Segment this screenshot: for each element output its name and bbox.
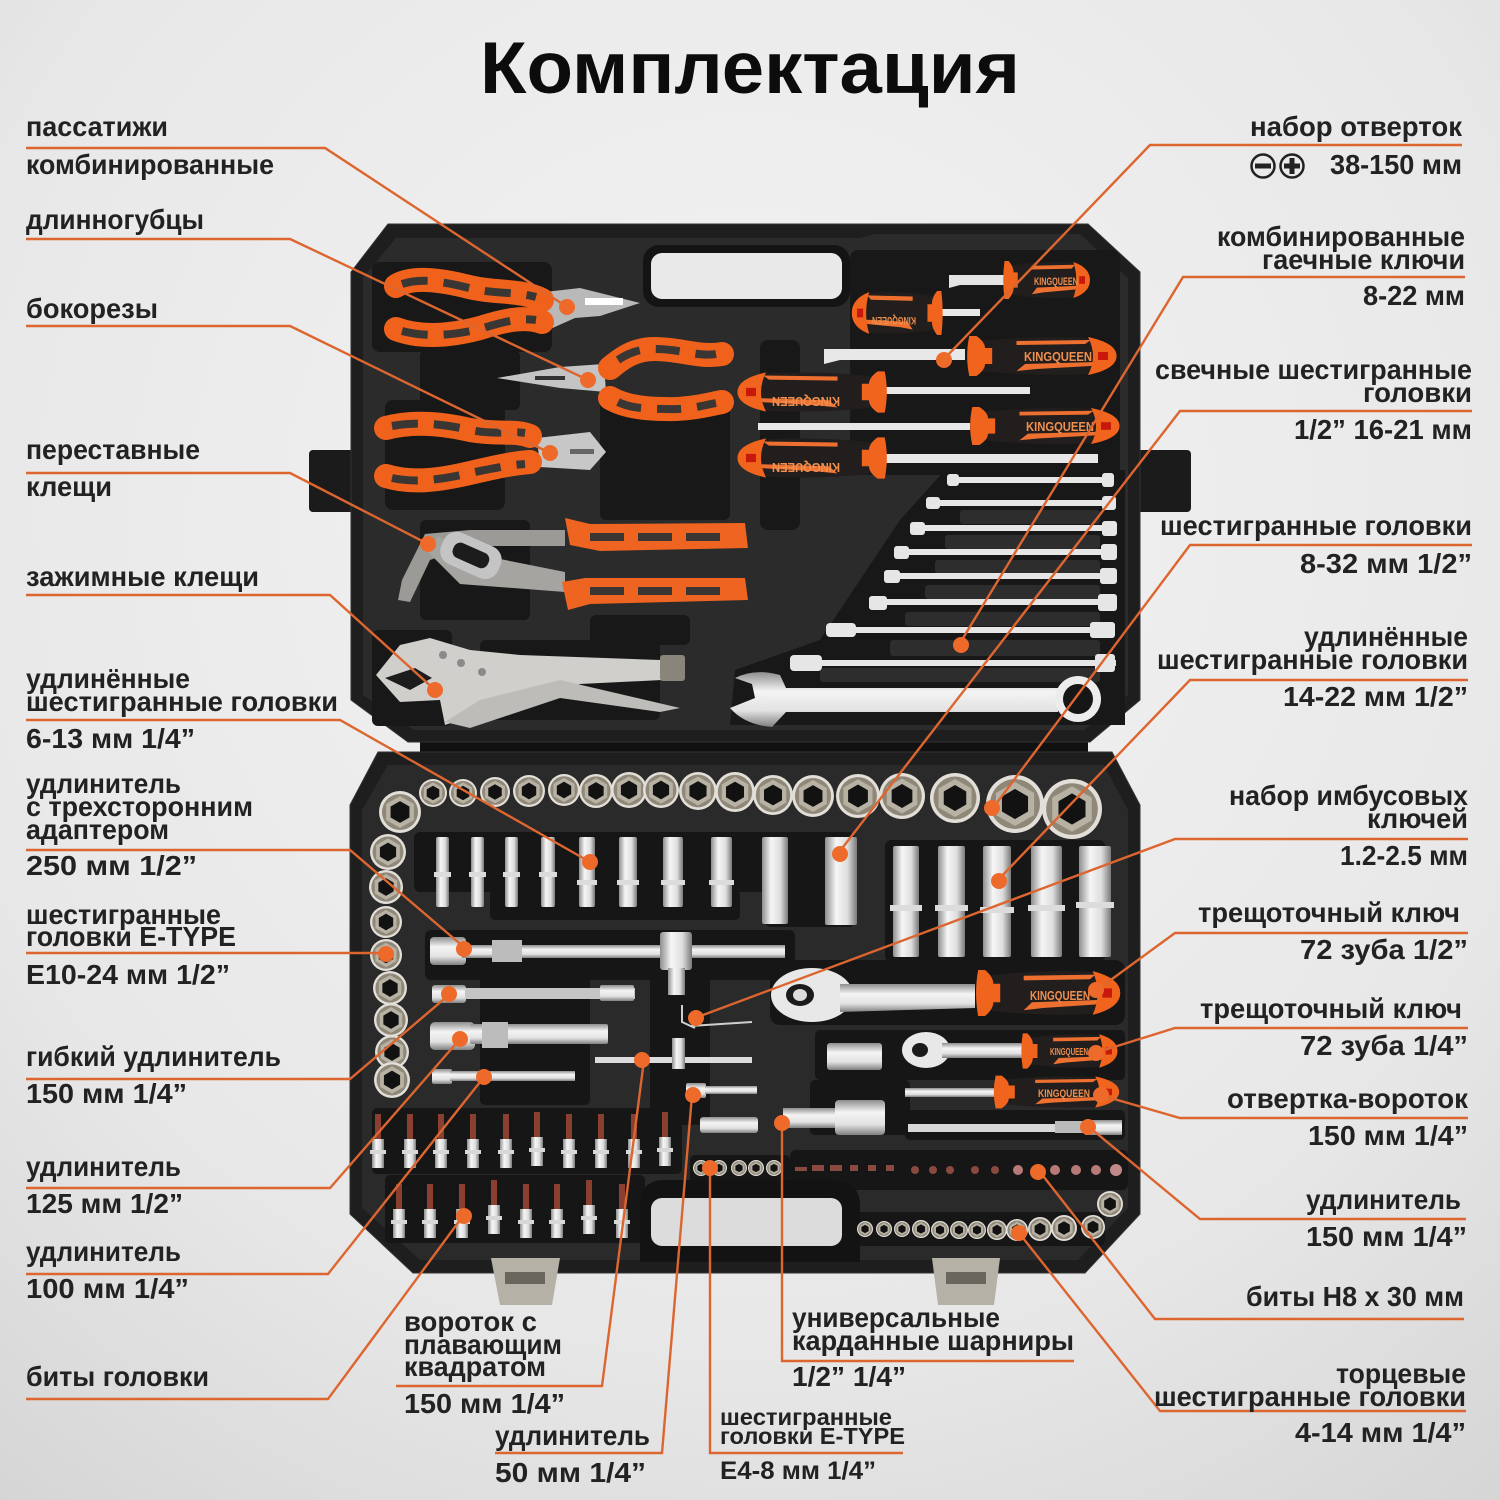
left labels: биты головки: [26, 1361, 209, 1392]
bottom labels: 50 мм 1/4”: [495, 1457, 646, 1488]
left labels: гибкий удлинитель: [26, 1041, 281, 1072]
left labels: удлинитель: [26, 768, 181, 799]
screwdriver 6: KINGQUEEN: [772, 460, 840, 475]
screwdriver 3: [824, 336, 1117, 376]
left labels: головки E-TYPE: [26, 921, 236, 952]
flexible extension: [432, 985, 635, 1003]
deep sockets: [434, 837, 1114, 957]
left labels: комбинированные: [26, 149, 274, 180]
callout dots: [378, 299, 1109, 1241]
carry handle opening: [643, 245, 850, 307]
right labels: трещоточный ключ: [1200, 993, 1462, 1024]
carry handle opening: [640, 1180, 860, 1262]
screwdriver 5: [758, 407, 1120, 445]
right labels: 72 зуба 1/4”: [1300, 1030, 1468, 1061]
left labels: длинногубцы: [26, 204, 204, 235]
bottom labels: E4-8 мм 1/4”: [720, 1457, 876, 1485]
left labels: клещи: [26, 471, 112, 502]
bottom labels: квадратом: [404, 1351, 546, 1382]
extension 150: [908, 1120, 1122, 1135]
left labels: E10-24 мм 1/2”: [26, 959, 230, 990]
screwdriver 1: [949, 261, 1090, 299]
small ratchet: KINGQUEEN: [1050, 1047, 1088, 1058]
case top half: [351, 224, 1140, 742]
right labels: [1154, 111, 1472, 1448]
right labels: 150 мм 1/4”: [1308, 1120, 1468, 1151]
left labels: 6-13 мм 1/4”: [26, 723, 195, 754]
bottom labels: плавающим: [404, 1329, 562, 1360]
small sockets row: [857, 1191, 1123, 1241]
bottom labels: головки E-TYPE: [720, 1423, 905, 1449]
pliers: water pump: [398, 518, 748, 610]
right labels: 4-14 мм 1/4”: [1295, 1417, 1466, 1448]
side latches: [309, 450, 1191, 512]
right labels: 72 зуба 1/2”: [1300, 934, 1468, 965]
tray recesses: [372, 250, 1125, 726]
case bottom half: [350, 752, 1140, 1273]
right labels: свечные шестигранные: [1155, 354, 1472, 385]
hinge: [420, 738, 1088, 756]
left labels: 150 мм 1/4”: [26, 1078, 187, 1109]
left labels: пассатижи: [26, 111, 168, 142]
left labels: переставные: [26, 434, 200, 465]
right labels: набор отверток: [1250, 111, 1463, 142]
right labels: биты H8 x 30 мм: [1246, 1281, 1464, 1312]
right labels: 1/2” 16-21 мм: [1294, 414, 1472, 445]
bottom labels: [404, 1302, 1074, 1488]
adapter: [827, 1043, 882, 1070]
right labels: удлинённые: [1304, 621, 1468, 652]
left labels: удлинённые: [26, 663, 190, 694]
left labels: 250 мм 1/2”: [26, 850, 197, 881]
right labels: удлинитель: [1306, 1184, 1461, 1215]
right labels: шестигранные головки: [1157, 644, 1468, 675]
screwdriver 5: KINGQUEEN: [1026, 419, 1094, 434]
left labels: шестигранные головки: [26, 686, 338, 717]
right labels: шестигранные головки: [1154, 1381, 1466, 1412]
pliers: combination: [396, 280, 640, 335]
left labels: с трехсторонним: [26, 791, 253, 822]
bottom labels: карданные шарниры: [792, 1325, 1074, 1356]
right labels: комбинированные: [1217, 221, 1465, 252]
bottom labels: шестигранные: [720, 1404, 892, 1430]
small extension: [686, 1083, 757, 1098]
hex keys: [682, 1005, 752, 1028]
left labels: бокорезы: [26, 293, 158, 324]
title: Комплектация: [480, 28, 1020, 109]
right labels: 8-22 мм: [1363, 280, 1465, 311]
tool case: [309, 224, 1191, 1305]
tray recesses: [372, 832, 1128, 1246]
spinner driver: KINGQUEEN: [1038, 1088, 1090, 1100]
small E-type sockets: [693, 1160, 782, 1176]
spinner driver: [905, 1076, 1119, 1108]
bottom labels: универсальные: [792, 1302, 1000, 1333]
bit row: [795, 1164, 1122, 1176]
left labels: шестигранные: [26, 899, 221, 930]
left labels: зажимные клещи: [26, 561, 259, 592]
left labels: [26, 111, 338, 1392]
right labels: трещоточный ключ: [1198, 897, 1460, 928]
right labels: гаечные ключи: [1262, 244, 1465, 275]
socket bits row 2: [391, 1180, 630, 1238]
screwdriver 4: KINGQUEEN: [772, 394, 840, 409]
bottom labels: удлинитель: [495, 1420, 650, 1451]
icon: slotted and phillips: [1252, 154, 1304, 178]
right labels: 8-32 мм 1/2”: [1300, 548, 1472, 579]
pliers: long nose: [497, 349, 722, 409]
right labels: 38-150 мм: [1330, 149, 1462, 180]
screwdriver 3: KINGQUEEN: [1024, 349, 1092, 364]
small ratchet: [902, 1032, 1118, 1069]
pliers: side cutters: [386, 424, 606, 480]
T-bar: [430, 932, 785, 995]
right labels: отвертка-вороток: [1227, 1083, 1469, 1114]
socket bits row 1: [370, 1112, 673, 1168]
right labels: 150 мм 1/4”: [1306, 1221, 1467, 1252]
extension 100: [432, 1069, 575, 1084]
left labels: 100 мм 1/4”: [26, 1273, 189, 1304]
left labels: 125 мм 1/2”: [26, 1188, 183, 1219]
sockets left column: [369, 791, 421, 1098]
left labels: адаптером: [26, 814, 169, 845]
large ratchet: KINGQUEEN: [1030, 988, 1090, 1003]
extension 125: [430, 1022, 608, 1050]
screwdriver 4: [737, 371, 1030, 413]
left labels: удлинитель: [26, 1151, 181, 1182]
right labels: 1.2-2.5 мм: [1340, 840, 1468, 871]
screwdriver 2: KINGQUEEN: [872, 314, 916, 326]
bottom labels: 1/2” 1/4”: [792, 1361, 906, 1392]
latches: [491, 1258, 1000, 1305]
combination wrenches: [730, 473, 1117, 727]
large ratchet: [771, 968, 1120, 1022]
screwdrivers: [737, 261, 1120, 479]
bottom labels: 150 мм 1/4”: [404, 1388, 565, 1419]
left labels: удлинитель: [26, 1236, 181, 1267]
pliers: locking: [376, 638, 685, 728]
right labels: торцевые: [1336, 1358, 1466, 1389]
right labels: ключей: [1367, 803, 1468, 834]
large wrench: [730, 672, 1101, 727]
right labels: 14-22 мм 1/2”: [1283, 681, 1468, 712]
screwdriver 2: [852, 291, 980, 335]
universal joints: [700, 1100, 885, 1135]
screwdriver 1: KINGQUEEN: [1034, 276, 1078, 288]
right labels: набор имбусовых: [1229, 780, 1468, 811]
right labels: головки: [1363, 377, 1472, 408]
screwdriver 6: [737, 437, 1098, 479]
bottom labels: вороток с: [404, 1306, 537, 1337]
right labels: шестигранные головки: [1160, 510, 1472, 541]
sockets top row: [419, 772, 1102, 839]
sliding T handle: [595, 1038, 752, 1069]
